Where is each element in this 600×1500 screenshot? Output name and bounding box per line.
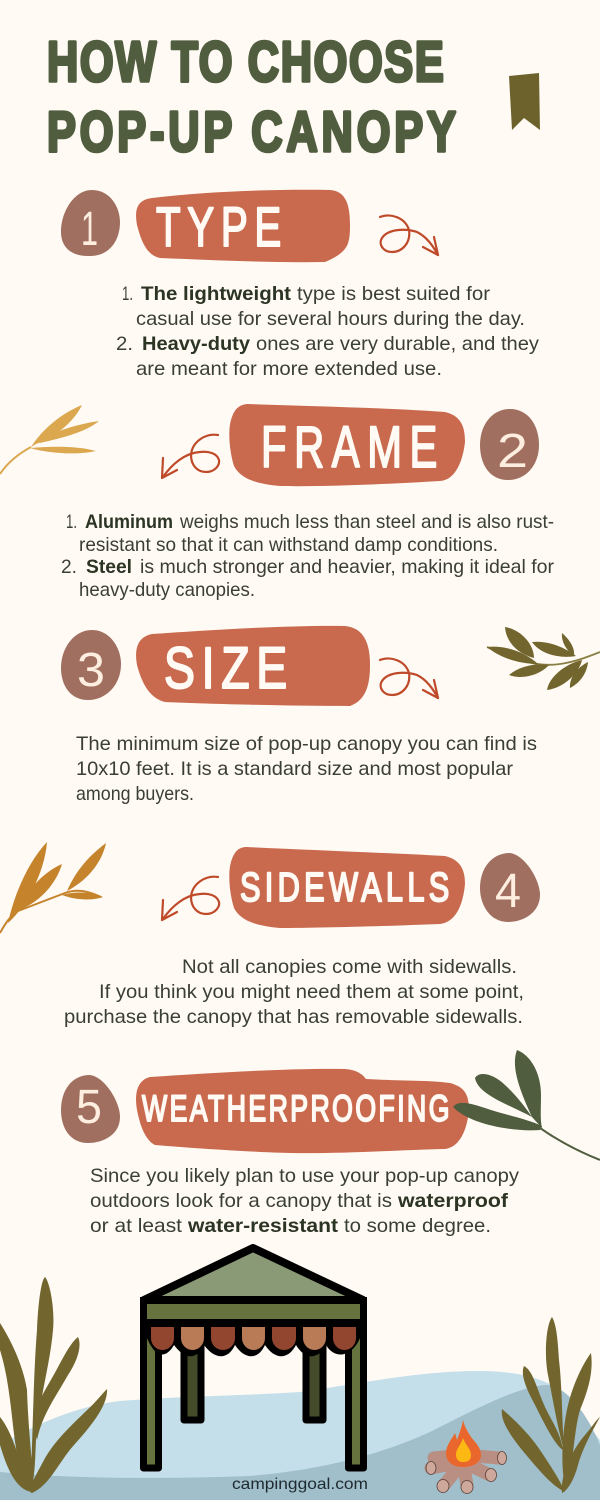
panel: weatherproofing (61, 1050, 600, 1237)
panel: type (61, 190, 539, 380)
title (47, 29, 456, 163)
text block: type: 2. (116, 333, 133, 355)
text block: frame: Steel (86, 556, 132, 578)
number badge 3 (61, 630, 121, 700)
arrow 2 (162, 435, 219, 478)
text block: weatherproofing: to some degree. (344, 1215, 491, 1237)
text block: frame: weighs much less than steel and is also rust- (179, 511, 554, 533)
front poles (144, 1300, 364, 1468)
text block: weatherproofing: outdoors look for a canopy that is (90, 1190, 392, 1212)
source credit: campinggoal.com (232, 1476, 368, 1493)
text block: frame: 1. (66, 511, 77, 533)
heading: frame: FRAME (261, 414, 437, 480)
heading: size (136, 626, 370, 706)
icon: bookmark ribbon (509, 73, 540, 130)
title: POP-UP CANOPY (47, 99, 456, 163)
illustration: pop-up canopy (144, 1248, 364, 1468)
heading: sidewalls (229, 847, 465, 928)
text block: type: The lightweight (141, 283, 292, 305)
text block: frame: Aluminum (85, 511, 173, 533)
text block: frame: 2. (61, 556, 77, 578)
number badge 3: 3 (77, 644, 105, 697)
text block: type: 1. (122, 283, 133, 305)
back poles (184, 1345, 323, 1420)
number badge 1: 1 (81, 203, 98, 256)
arrow 4 (162, 877, 219, 920)
panel: size (61, 626, 537, 805)
text block: type: type is best suited for (297, 283, 491, 305)
text block: sidewalls (64, 956, 524, 1028)
icon: gold leaf sprig (0, 405, 99, 474)
panel: frame (61, 404, 555, 601)
text block: weatherproofing: Since you likely plan to use your pop-up canopy (90, 1165, 519, 1187)
text block: type: are meant for more extended use. (136, 358, 442, 380)
text block: frame (61, 511, 555, 601)
heading: type: TYPE (156, 197, 281, 259)
text block: type: casual use for several hours during the day. (136, 308, 525, 330)
ground hills (0, 1371, 600, 1500)
text block: frame: is much stronger and heavier, making it ideal for (140, 556, 555, 578)
title: HOW TO CHOOSE (47, 29, 444, 93)
text block: size (76, 733, 537, 805)
text block: weatherproofing: waterproof (397, 1190, 509, 1212)
text block: type: Heavy-duty (142, 333, 250, 355)
icon: orange leaf sprig (0, 842, 106, 933)
text block: weatherproofing (90, 1165, 519, 1237)
heading: weatherproofing: WEATHERPROOFING (142, 1088, 449, 1129)
valance band (144, 1300, 364, 1322)
heading: size: SIZE (164, 636, 287, 701)
scallop fills (151, 1327, 356, 1350)
icon: campfire (426, 1420, 506, 1494)
arrow 3 (380, 659, 438, 698)
text block: sidewalls: If you think you might need them at some point, (99, 981, 524, 1003)
heading: weatherproofing (136, 1069, 469, 1153)
illustration: right plant (502, 1317, 600, 1493)
text block: size: among buyers. (76, 783, 194, 805)
text block: size: 10x10 feet. It is a standard size and most popular (76, 758, 514, 780)
text block: type: ones are very durable, and they (256, 333, 539, 355)
text block: frame: heavy-duty canopies. (79, 579, 255, 601)
text block: sidewalls: Not all canopies come with sidewalls. (182, 956, 517, 978)
text block: frame: resistant so that it can withstand damp conditions. (79, 534, 498, 556)
scalloped awning (147, 1322, 360, 1356)
arrow 1 (380, 216, 438, 255)
heading: sidewalls: SIDEWALLS (240, 864, 449, 910)
panel: sidewalls (64, 847, 540, 1028)
number badge 5 (61, 1075, 120, 1143)
icon: olive branch (487, 627, 600, 690)
number badge 2 (480, 409, 539, 480)
illustration: left plant (0, 1277, 107, 1493)
text block: size: The minimum size of pop-up canopy you can find is (76, 733, 537, 755)
text block: weatherproofing: water-resistant (187, 1215, 339, 1237)
number badge 4 (480, 853, 540, 922)
text block: weatherproofing: or at least (90, 1215, 183, 1237)
number badge 4: 4 (495, 865, 521, 918)
heading: type (136, 190, 350, 262)
text block: type (116, 283, 539, 380)
icon: dark green leaf (453, 1050, 600, 1160)
number badge 1 (61, 190, 120, 256)
text block: sidewalls: purchase the canopy that has removable sidewalls. (64, 1006, 523, 1028)
number badge 2: 2 (497, 425, 528, 478)
heading: frame (229, 404, 465, 486)
number badge 5: 5 (76, 1081, 102, 1134)
